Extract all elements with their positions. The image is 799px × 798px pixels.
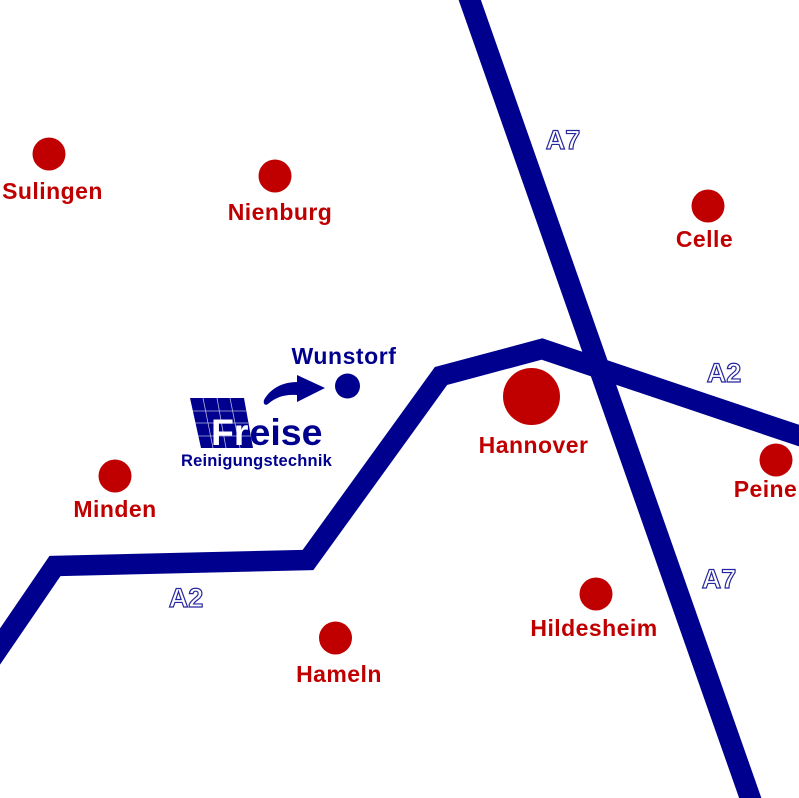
city: Nienburg: Nienburg (228, 199, 332, 225)
logo icon: solar panel grid (190, 398, 253, 448)
city: Sulingen: Sulingen (2, 178, 103, 204)
city: Hannover (479, 368, 588, 458)
city: Hameln (296, 622, 382, 687)
city: Minden: Minden (73, 496, 157, 522)
city: Sulingen (2, 138, 103, 204)
road: A2 motorway (0, 349, 799, 667)
location: Wunstorf: Wunstorf (292, 343, 396, 369)
city: Peine: Peine (734, 476, 797, 502)
logo wordmark: Freise (211, 411, 322, 453)
city: Minden (73, 460, 157, 522)
city: Hameln: Hameln (296, 661, 382, 687)
location: Wunstorf (292, 343, 396, 398)
city: Hannover: Hannover (479, 432, 588, 458)
logo tagline: Reinigungstechnik (181, 452, 333, 470)
icon: arrow to Wunstorf (264, 375, 325, 405)
logo: Freise Reinigungstechnik (181, 398, 333, 470)
road label: A7 north: A7 (546, 125, 580, 155)
city: Nienburg (228, 160, 332, 225)
road label: A2 west: A2 (169, 583, 203, 613)
road: A7 motorway (468, 0, 752, 798)
road label: A2 east: A2 (707, 358, 741, 388)
road label: A7 south: A7 (702, 564, 736, 594)
city: Hildesheim (530, 578, 658, 641)
city: Celle: Celle (676, 226, 733, 252)
city: Hildesheim: Hildesheim (530, 615, 658, 641)
city: Celle (676, 190, 733, 252)
city: Peine (734, 444, 797, 502)
